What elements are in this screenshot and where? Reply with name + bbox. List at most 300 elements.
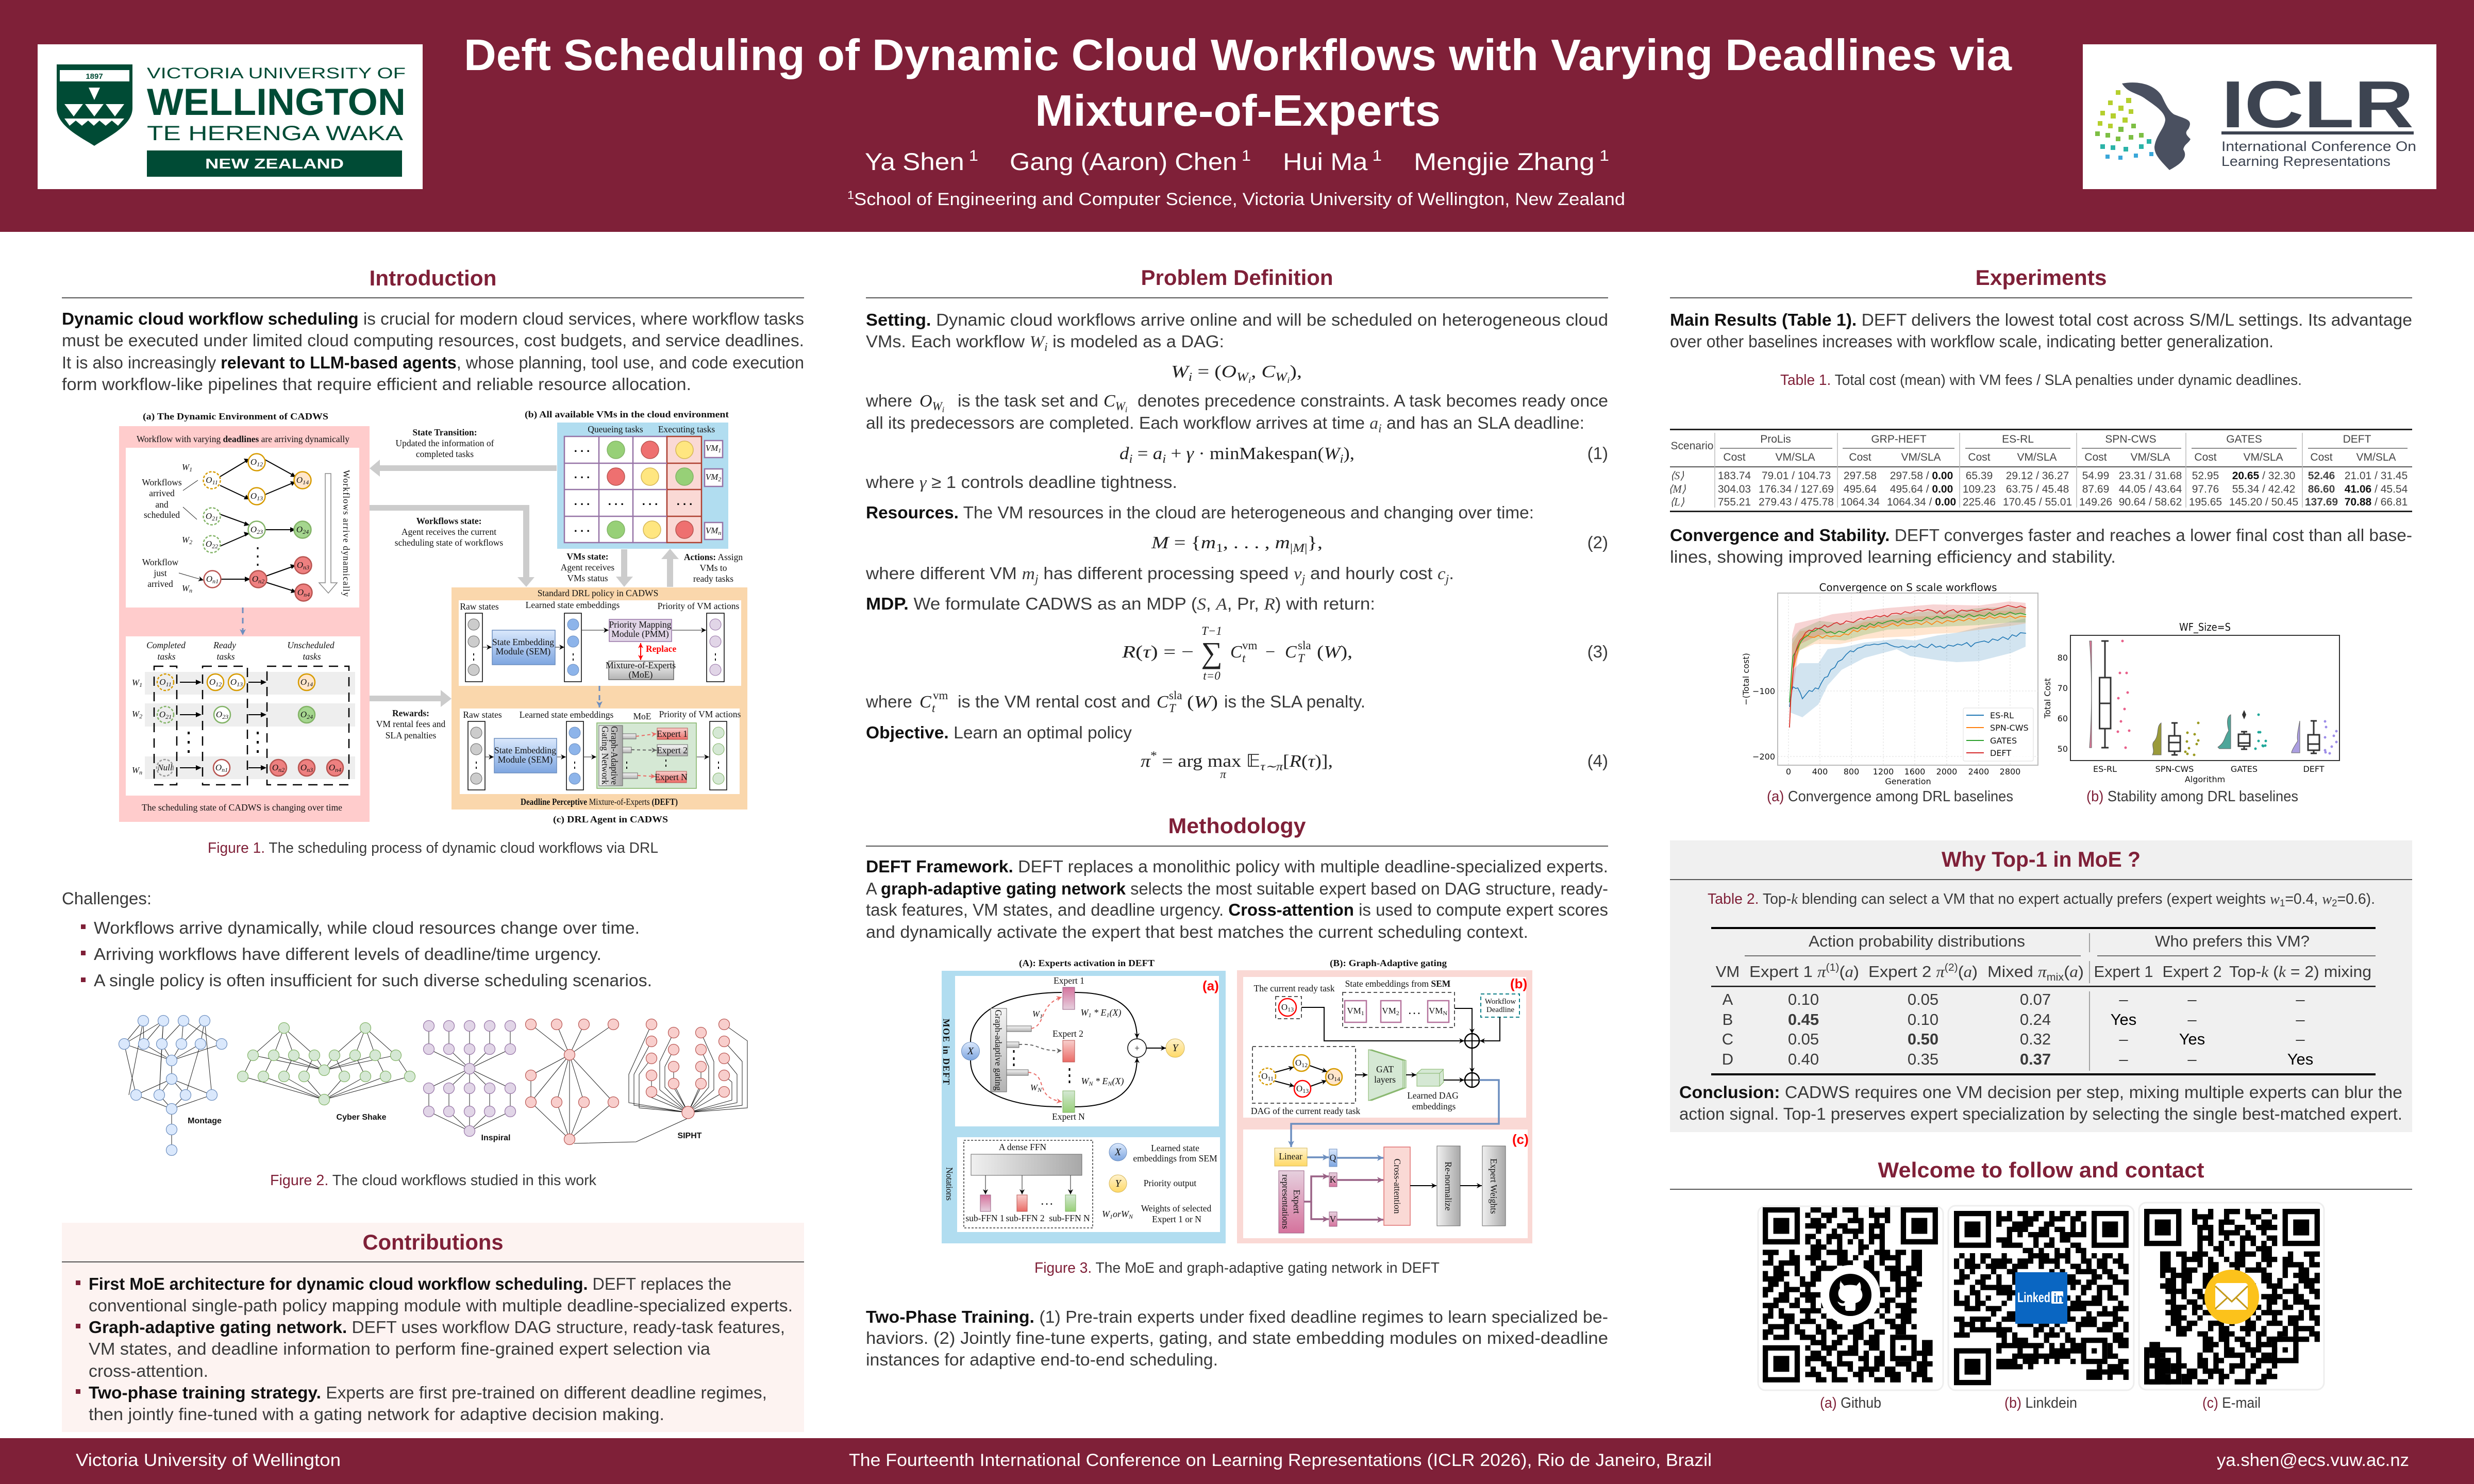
table 2: action probabilities: mix (2047, 972, 2064, 983)
workflow DAG nodes: 11 (212, 479, 218, 486)
table 2: action probabilities: A (1723, 990, 1733, 1008)
text: cost definitions: vm (933, 689, 948, 702)
panel B: graph-adaptive gating: (B): Graph-Adaptive gating (1330, 958, 1447, 968)
table 2: action probabilities (1711, 927, 2376, 1075)
label: rewards: SLA penalties (386, 730, 437, 740)
panel a: dynamic environment (119, 411, 370, 822)
notations legend: Priority output (1144, 1178, 1196, 1188)
connector: fused features to linear layer (1291, 1080, 1499, 1147)
label: state transition (396, 427, 494, 459)
text: main results (1670, 310, 2412, 351)
workflow DAG nodes: 2 (189, 538, 192, 546)
panel a: dynamic environment: (a) The Dynamic Environment of CADWS (143, 411, 328, 421)
equation: DAG definition: W (1275, 370, 1288, 383)
panel c: DRL agent: Standard DRL policy in CADWS (538, 588, 658, 598)
authors: 1 (1237, 147, 1251, 164)
equation: DAG definition: = ( (1192, 362, 1222, 381)
gating input features: 13 (1288, 1006, 1294, 1013)
heading: Experiments: Experiments (1975, 265, 2107, 290)
table 1: total cost results: 54.99 (2082, 470, 2109, 482)
table 2: action probabilities: – (2119, 990, 2128, 1008)
table 2: action probabilities: C (1722, 1030, 1733, 1048)
text: cost definitions: C (920, 693, 931, 712)
expert activation diagram: N (1037, 1086, 1042, 1093)
logo: ICLR: International Conference On (2221, 139, 2416, 154)
QR code: Github (1758, 1206, 1943, 1390)
table 1: total cost results: 55.34 / 42.42 (2232, 483, 2295, 495)
cross-attention pipeline (1275, 1146, 1506, 1233)
expert activation diagram: Expert N (1052, 1111, 1085, 1122)
label: state transition: completed tasks (416, 449, 474, 459)
task state table: 2 (139, 713, 142, 720)
heading: Methodology: Methodology (1168, 814, 1306, 838)
workflow DAG nodes (142, 453, 352, 601)
gating input features: N (1443, 1009, 1447, 1017)
expert activation diagram: N (1108, 1080, 1113, 1087)
arrow: workflows state (370, 505, 534, 587)
workflow DAG nodes: 24 (303, 528, 309, 535)
captions: QR codes: (a) Github (1820, 1395, 1881, 1411)
panel b: available VMs: . . . (608, 495, 624, 508)
expert activation diagram: * E (1092, 1007, 1107, 1018)
heading: welcome to follow and contact: Welcome to follow and contact (1878, 1158, 2204, 1182)
label: VMs state: VMs status (567, 573, 608, 583)
table 2: action probabilities: 0.05 (1788, 1030, 1819, 1048)
table 1: total cost results: VM/SLA (1901, 451, 1941, 463)
task state table: Completed (146, 640, 186, 650)
text: precedence: i (1125, 406, 1127, 414)
authors: Gang (Aaron) Chen (1010, 148, 1221, 175)
standard policy: Learned state embeddings (526, 600, 620, 610)
text: challenges (62, 889, 652, 990)
text: cost definitions: t (932, 702, 935, 715)
text: challenges: Arriving workflows have different levels of deadline/time urgency. (94, 945, 601, 964)
DEFT policy: Priority of VM actions (659, 709, 741, 719)
equation 2: | (1290, 542, 1293, 554)
text: DEFT framework: task features, VM states, and deadline urgency. Cross-attention is used to compute expert scores (866, 900, 1608, 919)
expert activation diagram: Expert 2 (1052, 1028, 1083, 1039)
notations legend: Weights of selected (1141, 1203, 1212, 1213)
table 2: action probabilities: – (2296, 1010, 2305, 1028)
caption: table 2: 1 (2280, 898, 2285, 909)
table 1: total cost results: 170.45 / 55.01 (2003, 496, 2072, 508)
table 1: total cost results: 183.74 (1718, 470, 1751, 482)
chart: convergence line plot: Generation (1885, 777, 1931, 786)
task state table: O (216, 710, 222, 719)
workflow DAG nodes: n (189, 587, 192, 594)
panel b: available VMs: . . . (574, 468, 590, 481)
title: Deft Scheduling of Dynamic Cloud Workflows with Varying Deadlines via (464, 31, 2012, 80)
text: setting: Setting. Dynamic cloud workflows arrive online and will be scheduled on heterogeneous cloud (866, 310, 1608, 329)
expert activation diagram: * E (1093, 1076, 1108, 1086)
equation 2: 1 (1216, 542, 1223, 554)
gating input features: Deadline (1486, 1006, 1514, 1014)
equation: DAG definition: i (1189, 370, 1192, 383)
equation 3: ∑ (1201, 636, 1223, 669)
standard policy: (MoE) (629, 669, 653, 680)
text: convergence and stability (1670, 526, 2412, 566)
equation: DAG definition: , (1251, 362, 1261, 381)
table 1: total cost results: 304.03 (1718, 483, 1751, 495)
logo: Victoria University of Wellington: NEW ZEALAND (205, 156, 344, 172)
text: cost definitions: T (1169, 702, 1177, 715)
caption: figure 3: Figure 3. The MoE and graph-adaptive gating network in DEFT (1034, 1260, 1440, 1276)
table 1: total cost results: Cost (2084, 451, 2107, 463)
standard policy: Priority of VM actions (658, 601, 739, 611)
workflow DAG nodes: 13 (257, 495, 263, 502)
notations legend: . . . (1041, 1196, 1052, 1207)
table 1: total cost results: 44.05 / 43.64 (2119, 483, 2182, 495)
arrow: actions (661, 549, 679, 587)
workflow DAG nodes: O (250, 457, 257, 467)
text: contribution list: conventional single-path policy mapping module with multiple deadline-specialized experts. (89, 1296, 793, 1315)
arrow: VMs state (616, 549, 633, 587)
DEFT policy: Module (SEM) (498, 754, 553, 765)
table 2: action probabilities: Expert 2 (2163, 963, 2221, 981)
task state table: tasks (158, 651, 176, 662)
equation 4: π (1220, 768, 1227, 781)
text: two-phase training: Two-Phase Training. (1) Pre-train experts under fixed deadline regimes to learn specialized be- (866, 1307, 1608, 1326)
table 1: total cost results: 41.06 / 45.54 (2345, 483, 2408, 495)
graph: SIPHT: SIPHT (677, 1132, 702, 1140)
notations legend: N (1128, 1213, 1133, 1220)
table 1: total cost results: ProLis (1760, 433, 1791, 445)
table 2: action probabilities: 0.40 (1788, 1050, 1819, 1068)
panel b: available VMs (525, 409, 729, 549)
caption: figure 1: Figure 1. The scheduling process of dynamic cloud workflows via DRL (208, 840, 658, 856)
graph: Inspiral: Inspiral (481, 1134, 510, 1142)
equation 1: ), (1343, 444, 1355, 463)
chart: convergence line plot: 2000 (1936, 767, 1957, 777)
label: actions: VMs to (700, 563, 727, 573)
panel b: available VMs: n (718, 529, 721, 536)
equation 4 (1141, 749, 1608, 781)
task state table: 1 (139, 681, 142, 688)
text: conclusion (1679, 1083, 2402, 1123)
workflow DAG nodes: O (296, 475, 303, 485)
text: convergence and stability: lines, showing improved learning efficiency and stability. (1670, 547, 2116, 566)
notations legend: sub-FFN 1 (965, 1213, 1005, 1223)
equation 1: i (1129, 452, 1132, 465)
expert activation diagram: X (967, 1045, 974, 1057)
label: VMs state: Agent receives (561, 562, 614, 572)
task state table: O (300, 677, 307, 687)
expert activation diagram: 1 (1107, 1011, 1110, 1019)
table 2: action probabilities: ( (2064, 963, 2070, 981)
panel: why top-1 in MoE (1670, 840, 2412, 1132)
task state table (132, 640, 355, 785)
DEFT policy: MoE (633, 711, 651, 721)
table 1: total cost results: 21.01 / 31.45 (2345, 470, 2408, 482)
task state table: tasks (303, 651, 321, 662)
cross-attention pipeline: K (1330, 1174, 1336, 1185)
expert activation diagram (962, 975, 1184, 1122)
chart: convergence line plot: 1200 (1873, 767, 1894, 777)
arrow: state transition (370, 460, 557, 477)
equation 1: a (1153, 444, 1162, 463)
text: introduction paragraph: It is also increasingly relevant to LLM-based agents, whose planning, tool use, and code execution (62, 353, 804, 372)
table 2: action probabilities: 0.05 (1908, 990, 1938, 1008)
icon: github (1829, 1274, 1871, 1316)
caption: table 1: Table 1. Total cost (mean) with VM fees / SLA penalties under dynamic deadlines. (1780, 372, 2302, 389)
chart legend: SPN-CWS (1990, 723, 2029, 733)
text: VM properties: . (1449, 564, 1454, 583)
task state table: Ready (213, 640, 236, 650)
label: VMs state (561, 551, 614, 583)
table 1: total cost results: Cost (1723, 451, 1746, 463)
notations legend: Learned state (1151, 1143, 1199, 1153)
label: actions: ready tasks (693, 574, 733, 584)
label: actions (684, 552, 743, 584)
task state table: 23 (222, 713, 228, 720)
text: challenges: A single policy is often insufficient for such diverse scheduling scenarios. (94, 971, 652, 990)
label: workflows state (395, 516, 503, 548)
workflow DAG nodes: 23 (257, 528, 263, 535)
expert activation diagram: W (1081, 1076, 1089, 1086)
text: cost definitions: is the VM rental cost and (958, 692, 1150, 711)
table 1: total cost results: VM/SLA (2017, 451, 2057, 463)
expert activation diagram: (X) (1112, 1076, 1124, 1087)
gating input features: State embeddings from SEM (1345, 979, 1451, 989)
panel: contributions (62, 1223, 804, 1432)
text: challenges: Challenges: (62, 889, 152, 908)
table 1: total cost results: Cost (1849, 451, 1871, 463)
equation 1: + (1166, 444, 1186, 463)
equation 3: T (1298, 652, 1306, 665)
task state table: 12 (215, 681, 222, 688)
text: introduction paragraph: Dynamic cloud workflow scheduling is crucial for modern cloud services, where workflow tasks (62, 309, 804, 328)
table 2: action probabilities: 0.35 (1908, 1050, 1938, 1068)
gating input features: 2 (1396, 1009, 1399, 1017)
workflow DAG nodes: O (250, 525, 257, 534)
graph: Cyber Shake: Cyber Shake (337, 1113, 387, 1122)
table 2: action probabilities: – (2296, 1030, 2305, 1048)
panel b: available VMs: Executing tasks (658, 424, 715, 434)
notations legend: Expert 1 or N (1152, 1214, 1201, 1224)
authors: 1 (1595, 147, 1609, 164)
workflow DAG nodes: just (153, 568, 167, 578)
table 2: action probabilities: Yes (2111, 1010, 2136, 1028)
DAG and GAT layers: 12 (1301, 1061, 1308, 1069)
heading: contributions: Contributions (363, 1230, 503, 1254)
task state table: n (139, 769, 142, 776)
text: precedence: denotes precedence constraints. A task becomes ready once (1138, 391, 1608, 410)
expert activation diagram: W (1081, 1007, 1089, 1018)
text: VM properties: where different VM m (866, 564, 1034, 583)
label: rewards (376, 708, 446, 740)
chart: convergence line plot: 1600 (1904, 767, 1925, 777)
chart: stability raincloud plot: Algorithm (2185, 774, 2225, 784)
notations legend: sub-FFN 2 (1006, 1213, 1045, 1223)
footer band: Victoria University of Wellington (76, 1451, 341, 1470)
DEFT policy: Raw states (463, 710, 502, 720)
icon: university shield (57, 64, 132, 146)
gating input features (1254, 979, 1519, 1087)
heading: why top-1: Why Top-1 in MoE ? (1942, 847, 2141, 871)
equation 4: [ (1283, 752, 1290, 771)
table 2: action probabilities: – (2187, 1050, 2197, 1068)
label: state transition: State Transition: (412, 427, 477, 437)
expert activation diagram: Y (1172, 1042, 1179, 1054)
DAG and GAT layers: embeddings (1412, 1101, 1456, 1111)
task state table: 13 (237, 681, 243, 688)
workflow DAG nodes: Workflows arrive dynamically (341, 470, 352, 597)
chart legend: GATES (1990, 736, 2017, 746)
workflow DAG nodes: O (206, 574, 212, 584)
text: setting: is modeled as a DAG: (1048, 332, 1224, 351)
graph: Inspiral (424, 1020, 515, 1142)
text: precedence: and has an SLA deadline: (1382, 413, 1584, 432)
text: DEFT framework: DEFT Framework. DEFT replaces a monolithic policy with multiple deadline-specialized experts. (866, 857, 1608, 876)
text: contribution list: First MoE architecture for dynamic cloud workflow scheduling. DEFT replaces the (89, 1274, 731, 1293)
table 1: total cost results: 279.43 / 475.78 (1759, 496, 1834, 508)
text: conclusion: action signal. Top-1 preserves expert specialization by selecting the single best-matched expert. (1679, 1104, 2402, 1123)
chart: stability raincloud plot: ES-RL (2093, 764, 2117, 774)
text: contribution list: VM states, and deadline information to perform fine-grained expert selection via (89, 1339, 711, 1358)
equation 3: t (1242, 652, 1246, 665)
task state table: 14 (307, 681, 313, 688)
standard policy: Raw states (460, 601, 499, 612)
table 2: action probabilities: 0.37 (2020, 1050, 2051, 1068)
task state table: W (132, 678, 139, 687)
text: resources: Resources. The VM resources in the cloud are heterogeneous and changing over time: (866, 503, 1534, 522)
caption: figure 2: Figure 2. The cloud workflows studied in this work (270, 1172, 596, 1189)
table 1: total cost results: 149.26 (2079, 496, 2112, 508)
text: precedence: all its predecessors are completed. Each workflow arrives at time a (866, 413, 1378, 433)
expert activation diagram: N (1088, 1080, 1093, 1087)
notations legend (964, 1140, 1217, 1228)
text: setting: VMs. Each workflow W (866, 332, 1044, 351)
label: VMs state: VMs state: (566, 551, 609, 562)
caption: table 2: =0.4, (2285, 891, 2322, 907)
DEFT policy: State Embedding (494, 745, 556, 755)
workflow DAG nodes: O (206, 511, 212, 521)
chart: stability raincloud plot: 70 (2058, 683, 2068, 693)
workflow DAG nodes: O (252, 574, 258, 584)
notations legend: embeddings from SEM (1133, 1153, 1217, 1163)
panel c: DRL agent: (c) DRL Agent in CADWS (553, 814, 668, 824)
DEFT policy: Graph-Adaptive (609, 726, 620, 785)
heading: Problem Definition: Problem Definition (1141, 265, 1333, 290)
text: precedence (865, 391, 1608, 435)
table 2: action probabilities: 0.10 (1788, 990, 1819, 1008)
task state table: n1 (222, 766, 228, 773)
panel a: dynamic environment: The scheduling state of CADWS is changing over time (142, 802, 342, 813)
table 2: action probabilities: – (2187, 990, 2197, 1008)
table 1: total cost results: ⟨M⟩ (1668, 483, 1686, 495)
panel b: available VMs: 2 (718, 476, 721, 483)
table 1: total cost results: 23.31 / 31.68 (2119, 470, 2182, 482)
task state table: O (230, 677, 237, 687)
table 1: total cost results: DEFT (2343, 433, 2371, 445)
equation 3: T−1 (1201, 625, 1222, 637)
table 1: total cost results: 495.64 (1844, 483, 1877, 495)
text: introduction paragraph: must be executed under limited cloud computing resources, cost budgets, and service deadlines. (62, 331, 804, 350)
authors: 1 (1367, 147, 1382, 164)
chart: convergence line plot: 0 (1786, 767, 1791, 777)
footer band (0, 1438, 2474, 1484)
table 1: total cost results: ES-RL (2002, 433, 2034, 445)
equation 3: vm (1242, 639, 1258, 652)
chart: stability raincloud plot: Total Cost (2043, 678, 2052, 719)
table 2: action probabilities: Mixed π (1987, 963, 2046, 981)
task state table: O (215, 763, 222, 772)
text: precedence: O (920, 392, 932, 411)
chart: stability raincloud plot: DEFT (2303, 764, 2325, 774)
table 1: total cost results (1668, 429, 2412, 512)
table 1: total cost results: 137.69 (2305, 496, 2338, 508)
gating input features: VM (1347, 1006, 1361, 1016)
text: precedence: W (932, 400, 943, 413)
logo: ICLR (2083, 44, 2436, 189)
DAG and GAT layers: O (1261, 1071, 1267, 1081)
task state table: 21 (165, 713, 172, 720)
caption: subfigure b: (b) Stability among DRL baselines (2086, 788, 2298, 805)
workflow DAG nodes: n4 (304, 591, 310, 598)
equation 2 (1151, 533, 1608, 554)
text: deadline tightness: where γ ≥ 1 controls deadline tightness. (865, 473, 1177, 492)
chart: convergence line plot: 2800 (2000, 767, 2020, 777)
equation 1: d (1119, 444, 1128, 463)
workflow DAG nodes: W (182, 535, 189, 545)
cross-attention pipeline: Q (1330, 1153, 1336, 1163)
panel b: available VMs: (b) All available VMs in the cloud environment (525, 409, 729, 419)
text: precedence: i (942, 406, 944, 414)
table 1: total cost results: 52.46 (2308, 470, 2335, 482)
graph: Montage (119, 1015, 227, 1155)
task state table: Null (157, 763, 173, 772)
equation 3: − (1265, 643, 1275, 662)
panel b: available VMs: . . . (574, 495, 590, 508)
equation 4: π (1141, 752, 1149, 771)
panel A: experts activation (941, 958, 1226, 1243)
text: objective: Objective. Learn an optimal policy (866, 723, 1132, 742)
label: rewards: VM rental fees and (376, 719, 446, 729)
notations legend: sub-FFN N (1049, 1213, 1090, 1223)
text: DEFT framework: A graph-adaptive gating network selects the most suitable expert based on DAG structure, ready- (866, 879, 1608, 898)
table 2: action probabilities: Expert 1 (2094, 963, 2153, 981)
expert activation diagram: Expert 1 (1054, 975, 1084, 986)
panel c: DRL agent (452, 587, 747, 824)
equation 4: (4) (1587, 751, 1608, 770)
cross-attention pipeline: Linear (1279, 1151, 1302, 1161)
cross-attention pipeline: Expert Weights (1489, 1158, 1499, 1214)
text: VM properties: v (1294, 565, 1302, 583)
task state table: W (132, 709, 139, 719)
authors: 1 (964, 147, 978, 164)
expert activation diagram: Graph-adaptive gating (993, 1010, 1004, 1091)
panel b: available VMs: VM (706, 526, 718, 535)
cross-attention pipeline: V (1330, 1214, 1336, 1224)
text: contribution list (76, 1274, 793, 1424)
table 1: total cost results: 176.34 / 127.69 (1759, 483, 1834, 495)
panel A: experts activation: Notations (944, 1167, 955, 1201)
arrow: dashed down (599, 686, 600, 707)
text: VM properties: c (1437, 565, 1446, 583)
gating input features: 1 (1361, 1009, 1364, 1017)
icon: linkedin: Linked (2017, 1290, 2050, 1305)
chart: convergence line plot: 800 (1844, 767, 1859, 777)
DAG and GAT layers: 11 (1267, 1075, 1274, 1082)
standard policy: Replace (646, 644, 677, 654)
equation 3: C (1285, 643, 1297, 662)
table 2: action probabilities: ( (1958, 963, 1964, 981)
gating input features: The current ready task (1254, 983, 1335, 993)
table 1: total cost results: 63.75 / 45.48 (2006, 483, 2069, 495)
DEFT policy: Learned state embeddings (520, 710, 614, 720)
panel b: available VMs: VM (706, 472, 718, 482)
authors (865, 147, 1609, 175)
